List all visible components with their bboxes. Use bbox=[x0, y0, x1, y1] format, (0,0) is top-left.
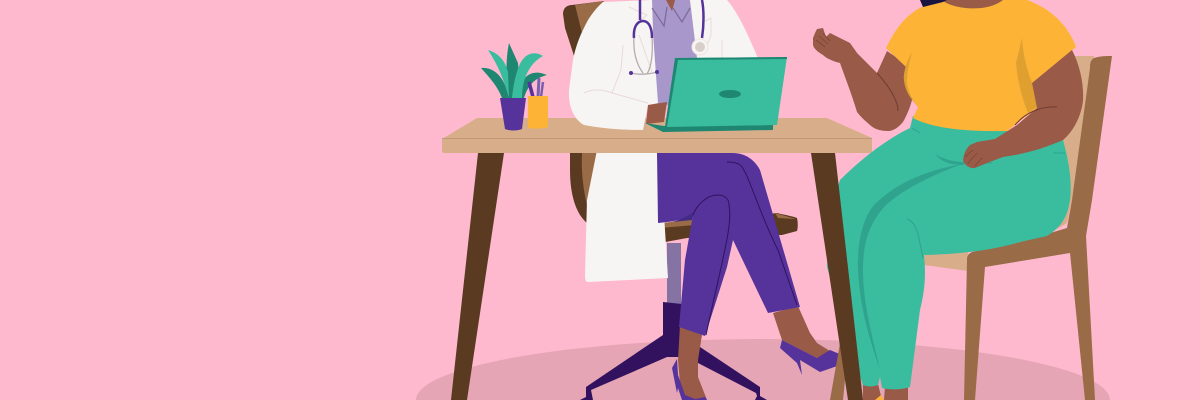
patient resting arm bbox=[963, 50, 1083, 168]
floor shadow bbox=[416, 339, 1110, 400]
patient raised arm bbox=[813, 28, 915, 131]
patient legs and trousers bbox=[827, 116, 1071, 400]
patient shirt bbox=[886, 0, 1076, 131]
pen holder bbox=[528, 78, 548, 129]
plant pot bbox=[481, 43, 547, 130]
doctor legs and trousers bbox=[657, 153, 843, 400]
desk bbox=[442, 118, 872, 400]
doctor upper body and coat bbox=[569, 0, 758, 130]
stethoscope bbox=[629, 0, 708, 75]
doctor hand bbox=[646, 102, 667, 124]
doctor lower coat bbox=[585, 150, 668, 282]
laptop bbox=[645, 57, 787, 132]
patient chair bbox=[830, 56, 1112, 400]
doctor chair bbox=[563, 1, 798, 400]
